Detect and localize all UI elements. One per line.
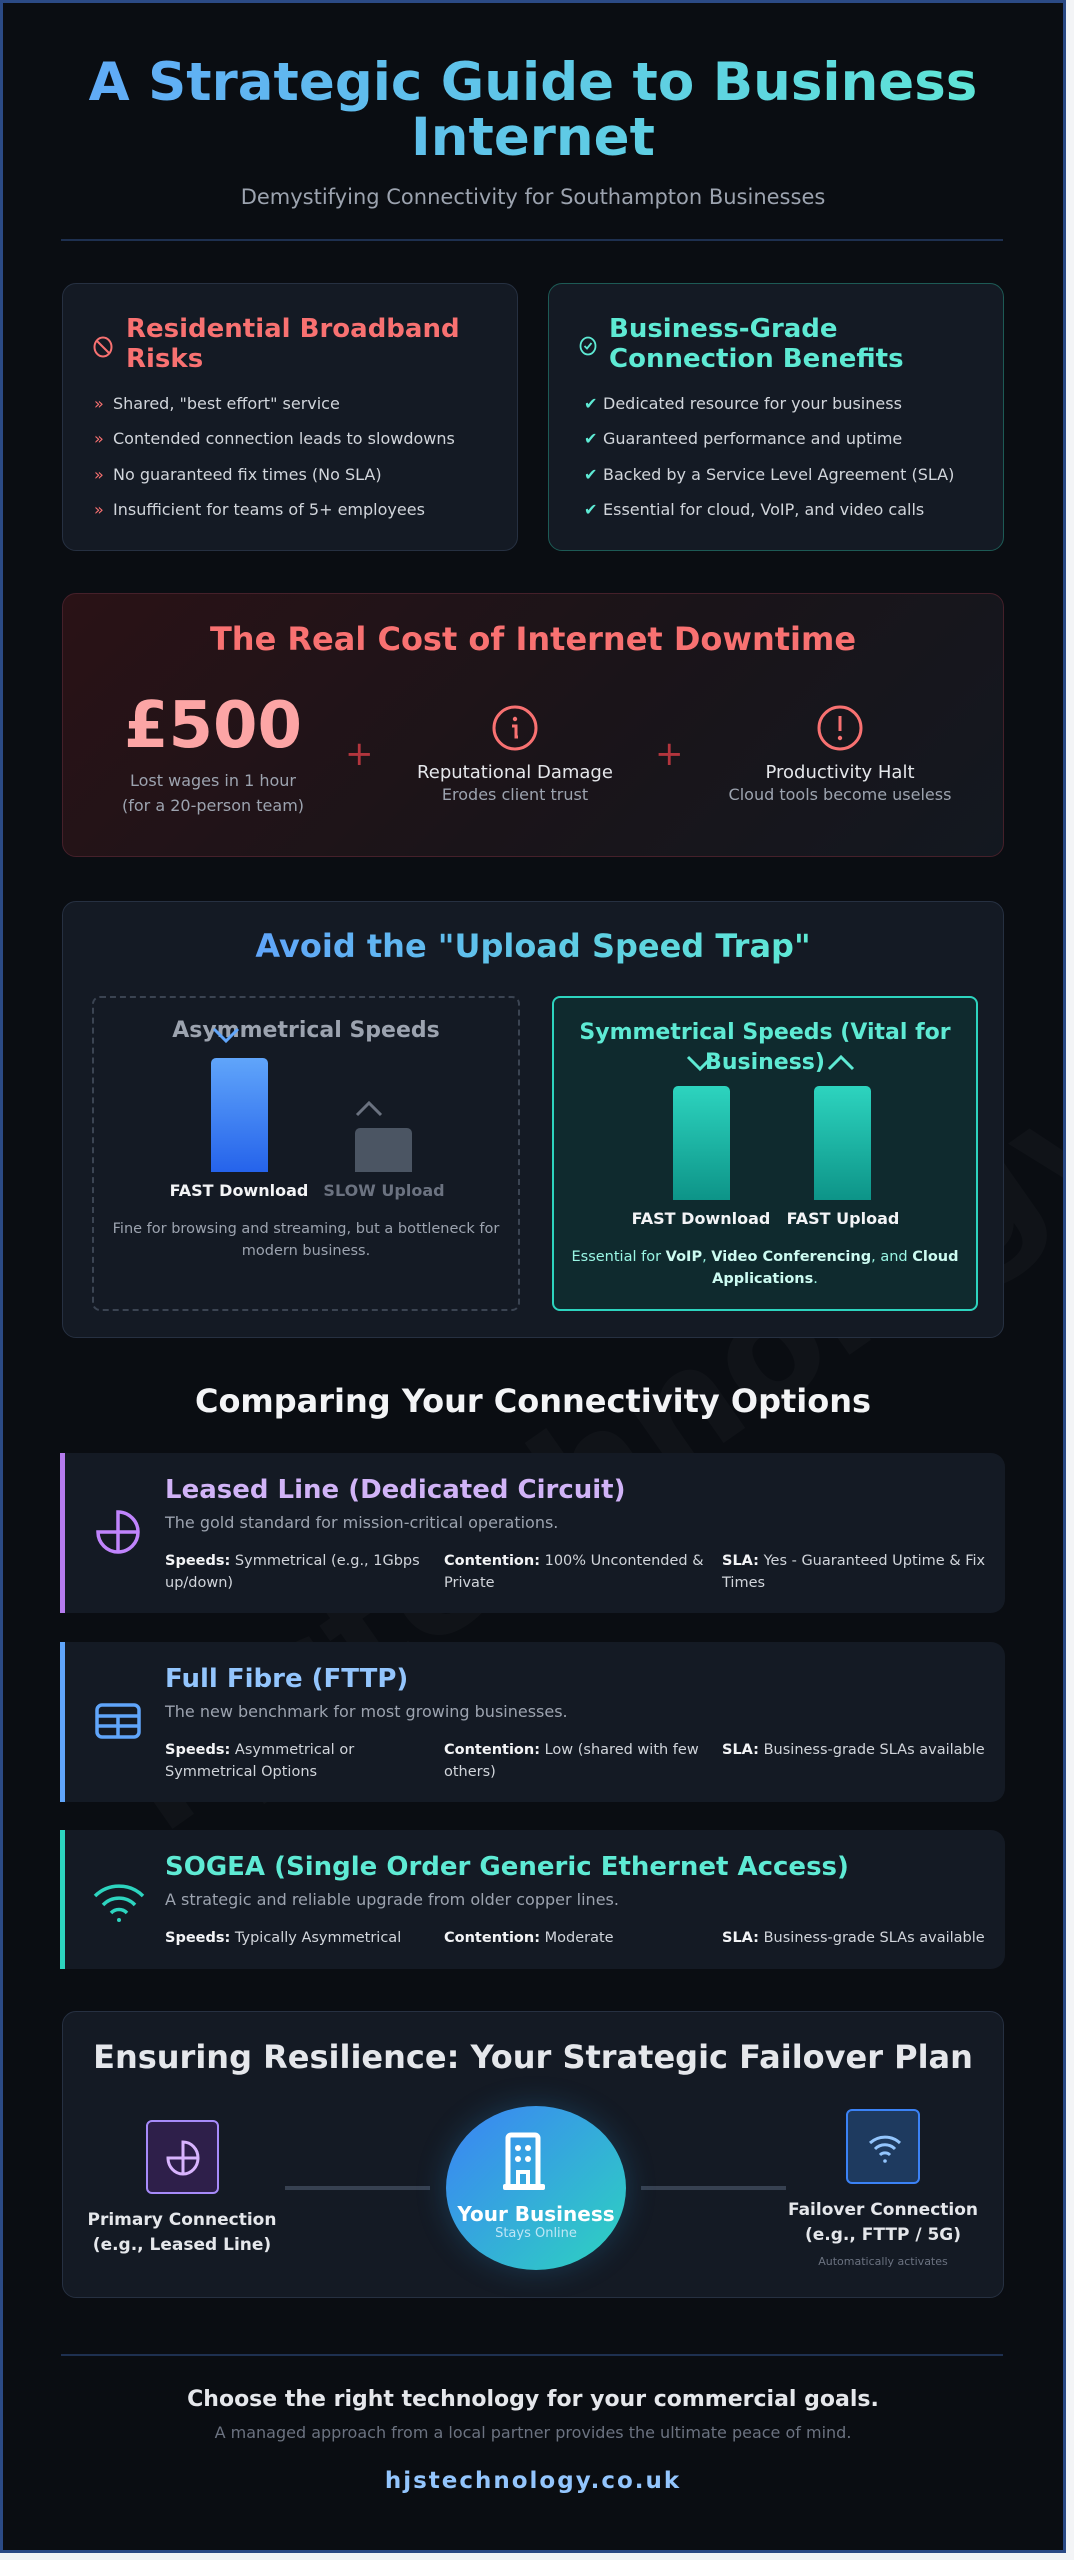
option: full fibre: The new benchmark for most growing businesses. bbox=[165, 1702, 568, 1721]
sub-panel: symmetrical: Essential for VoIP, Video Conferencing, and Cloud Applications. bbox=[571, 1249, 958, 1287]
stat: reputational damage bbox=[417, 706, 613, 804]
sub-panel: symmetrical: FAST Upload bbox=[787, 1209, 899, 1228]
bar: upload bbox=[814, 1086, 871, 1200]
panel: upload speed trap bbox=[62, 901, 1004, 1338]
panel: residential risks: Insufficient for teams of 5+ employees bbox=[113, 500, 425, 519]
heading bbox=[609, 314, 904, 374]
panel: resilience bbox=[62, 2011, 1004, 2298]
icon: check circle bbox=[580, 336, 596, 356]
icon: alert bbox=[818, 706, 862, 750]
option: leased line bbox=[60, 1453, 1005, 1613]
panel: residential risks: Shared, "best effort" service bbox=[113, 394, 340, 413]
option: SOGEA: Speeds: Typically Asymmetrical bbox=[165, 1930, 401, 1946]
node: your business: Your Business bbox=[457, 2202, 615, 2226]
node: failover: Failover Connection bbox=[788, 2200, 978, 2220]
option: SOGEA: SLA: Business-grade SLAs available bbox=[722, 1930, 985, 1946]
icon: prohibited bbox=[94, 336, 112, 358]
stat: productivity halt: Productivity Halt bbox=[765, 762, 915, 783]
node: your business bbox=[446, 2106, 626, 2270]
option: leased line: Speeds: Symmetrical (e.g., 1Gbps up/down) bbox=[165, 1553, 420, 1591]
node: primary: Primary Connection bbox=[88, 2210, 276, 2230]
panel: business benefits: Backed by a Service Level Agreement (SLA) bbox=[603, 465, 954, 484]
panel: residential risks: » bbox=[94, 465, 104, 484]
option: SOGEA: A strategic and reliable upgrade from older copper lines. bbox=[165, 1890, 619, 1909]
sub-panel: symmetrical: FAST Download bbox=[632, 1209, 770, 1228]
plus: + bbox=[345, 734, 374, 774]
heading bbox=[126, 314, 460, 374]
stat: reputational damage: Reputational Damage bbox=[417, 762, 613, 783]
stat: £500: Lost wages in 1 hour bbox=[130, 771, 296, 790]
sub-panel: asymmetrical: Fine for browsing and streaming, but a bottleneck for modern business. bbox=[113, 1221, 499, 1259]
panel: residential risks: No guaranteed fix times (No SLA) bbox=[113, 465, 382, 484]
panel: business benefits: Dedicated resource for your business bbox=[603, 394, 902, 413]
panel: residential risks: Contended connection leads to slowdowns bbox=[113, 429, 455, 448]
option: leased line: Contention: 100% Uncontended & Private bbox=[444, 1553, 704, 1591]
panel: residential risks: » bbox=[94, 394, 104, 413]
heading: Risks bbox=[126, 344, 203, 374]
icon: chevron down bbox=[687, 1056, 713, 1071]
option: full fibre bbox=[60, 1642, 1005, 1802]
stat: reputational damage: Erodes client trust bbox=[442, 785, 588, 804]
icon: fibre bbox=[95, 1703, 141, 1739]
option: leased line: SLA: Yes - Guaranteed Uptime & Fix Times bbox=[722, 1553, 985, 1591]
option: full fibre: Contention: Low (shared with few others) bbox=[444, 1742, 699, 1780]
option: full fibre: Speeds: Asymmetrical or Symmetrical Options bbox=[165, 1742, 354, 1780]
node: primary bbox=[88, 2120, 276, 2255]
option: SOGEA: SOGEA (Single Order Generic Ethernet Access) bbox=[165, 1852, 849, 1882]
sub-panel: symmetrical: Business) bbox=[705, 1050, 825, 1075]
panel: business benefits: ✔ bbox=[584, 465, 597, 484]
sub-panel: asymmetrical: SLOW Upload bbox=[323, 1181, 445, 1200]
sub-panel: asymmetrical: Asymmetrical Speeds bbox=[172, 1018, 440, 1043]
node: failover bbox=[788, 2109, 978, 2268]
footer text: Choose the right technology for your commercial goals. bbox=[187, 2387, 879, 2412]
text: A managed approach from a local partner provides the ultimate peace of mind. bbox=[215, 2423, 851, 2442]
panel: business benefits: ✔ bbox=[584, 394, 597, 413]
title: A Strategic Guide to Business bbox=[89, 52, 977, 113]
heading: Ensuring Resilience: Your Strategic Failover Plan bbox=[93, 2038, 973, 2076]
panel: downtime cost bbox=[62, 593, 1004, 857]
panel: business benefits bbox=[548, 283, 1004, 551]
sub-panel: symmetrical bbox=[552, 996, 978, 1311]
panel: business benefits: ✔ bbox=[584, 500, 597, 519]
title: Internet bbox=[411, 107, 655, 168]
list bbox=[94, 394, 455, 519]
bar: download bbox=[211, 1058, 268, 1172]
heading: Residential Broadband bbox=[126, 314, 460, 344]
footer url: hjstechnology.co.uk bbox=[385, 2468, 681, 2494]
panel: residential risks bbox=[62, 283, 518, 551]
bar: upload bbox=[355, 1128, 412, 1172]
option: full fibre: SLA: Business-grade SLAs available bbox=[722, 1742, 985, 1758]
sub-panel: asymmetrical: FAST Download bbox=[170, 1181, 308, 1200]
panel: residential risks: » bbox=[94, 429, 104, 448]
icon: chevron down bbox=[213, 1028, 239, 1043]
list bbox=[584, 394, 954, 519]
option: SOGEA: Contention: Moderate bbox=[444, 1930, 614, 1946]
subtitle: Demystifying Connectivity for Southampton Businesses bbox=[241, 185, 825, 209]
stat: productivity halt: Cloud tools become useless bbox=[729, 785, 951, 804]
option: SOGEA bbox=[60, 1830, 1005, 1969]
panel: business benefits: Essential for cloud, VoIP, and video calls bbox=[603, 500, 924, 519]
panel: business benefits: Guaranteed performance and uptime bbox=[603, 429, 902, 448]
option: leased line: Leased Line (Dedicated Circuit) bbox=[165, 1475, 625, 1505]
icon: chevron up bbox=[356, 1101, 382, 1116]
icon: info bbox=[492, 706, 538, 750]
stat: £500: (for a 20-person team) bbox=[122, 796, 304, 815]
node: failover: Automatically activates bbox=[818, 2255, 948, 2268]
icon: leased bbox=[96, 1510, 140, 1554]
stat: productivity halt bbox=[729, 706, 951, 804]
bar: download bbox=[673, 1086, 730, 1200]
node: failover: (e.g., FTTP / 5G) bbox=[805, 2225, 961, 2245]
heading: comparing options: Comparing Your Connectivity Options bbox=[195, 1382, 871, 1420]
title bbox=[3, 55, 1063, 165]
heading: Avoid the "Upload Speed Trap" bbox=[255, 927, 811, 965]
node: your business: Stays Online bbox=[495, 2226, 577, 2241]
panel: residential risks: » bbox=[94, 500, 104, 519]
sub-panel: asymmetrical bbox=[92, 996, 520, 1311]
stat: £500: £500 bbox=[124, 689, 302, 763]
icon: wifi bbox=[94, 1884, 144, 1922]
connector lines bbox=[285, 2186, 430, 2190]
plus: + bbox=[655, 734, 684, 774]
option: full fibre: Full Fibre (FTTP) bbox=[165, 1664, 408, 1694]
heading: Connection Benefits bbox=[609, 344, 904, 374]
sub-panel: symmetrical: Symmetrical Speeds (Vital for bbox=[579, 1020, 951, 1045]
option: leased line: The gold standard for mission-critical operations. bbox=[165, 1513, 558, 1532]
icon: chevron up bbox=[828, 1055, 854, 1070]
node: primary: (e.g., Leased Line) bbox=[93, 2235, 271, 2255]
heading: Business-Grade bbox=[609, 314, 838, 344]
panel: business benefits: ✔ bbox=[584, 429, 597, 448]
heading: The Real Cost of Internet Downtime bbox=[210, 620, 856, 658]
stat: £500 bbox=[122, 689, 304, 815]
